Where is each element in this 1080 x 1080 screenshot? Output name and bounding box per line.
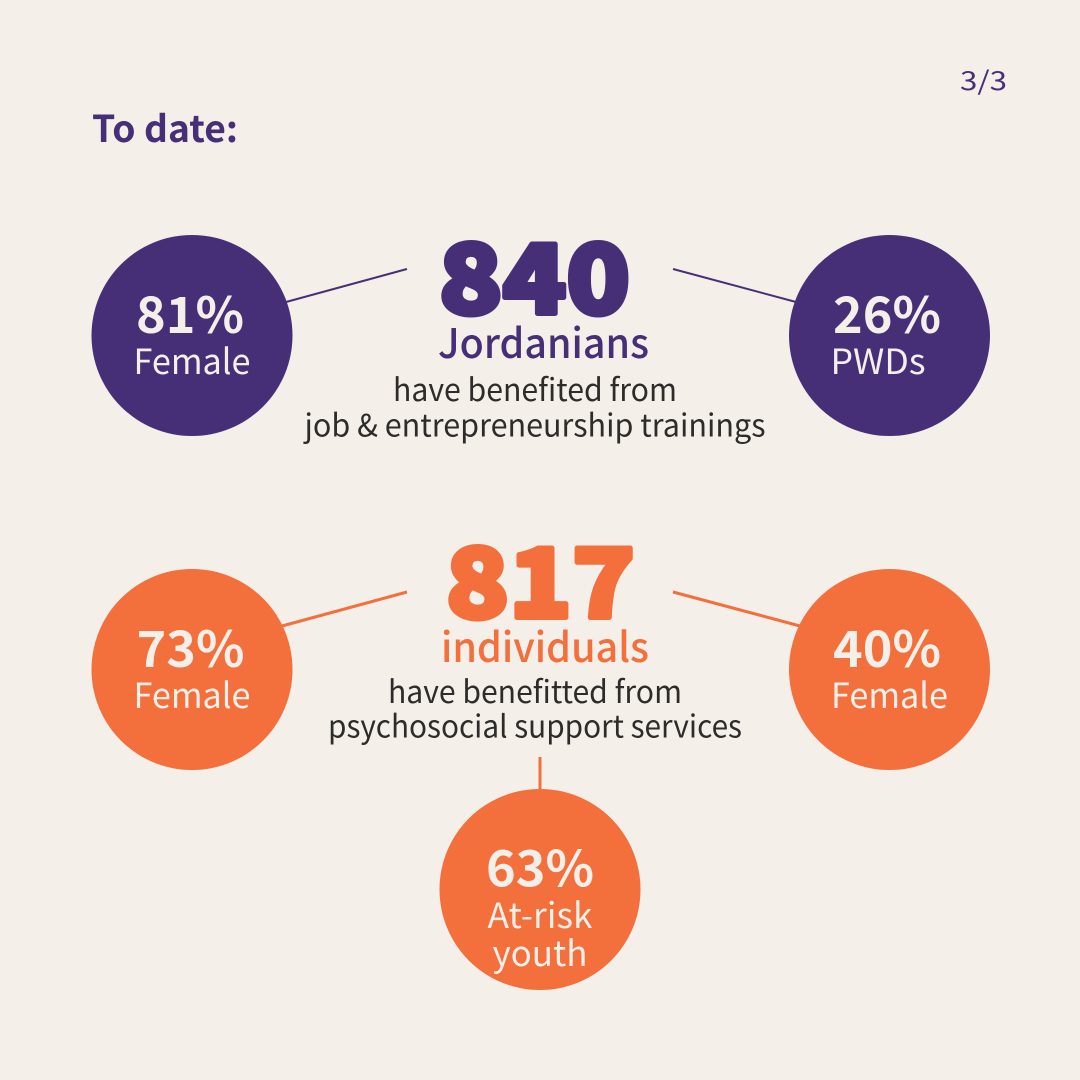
stat circle: 81% Female: 81% — [136, 276, 244, 348]
connector: left purple — [286, 269, 407, 302]
big number 840: 840 — [439, 202, 630, 342]
description: psychosocial — [328, 667, 742, 746]
connector: left orange — [282, 592, 407, 626]
label: individuals: individuals — [441, 614, 649, 674]
panel: job and entrepreneurship trainings — [92, 202, 990, 446]
description: trainings: have benefited from — [393, 365, 677, 410]
stat circle: 73% Female: 73% — [136, 610, 244, 682]
stat circle: 63% At-risk youth: youth — [492, 926, 588, 977]
stat circle: 63% At-risk youth — [440, 789, 640, 990]
stat circle: 63% At-risk youth: 63% — [486, 830, 594, 902]
stat circle: 26% PWDs: PWDs — [830, 334, 926, 385]
stat circle: 63% At-risk youth: At-risk — [488, 888, 592, 939]
title: To date: — [92, 99, 238, 153]
description: trainings: job & entrepreneurship trainings — [303, 400, 766, 446]
stat circle: 26% PWDs — [789, 235, 990, 436]
stat circle: 73% Female — [92, 569, 292, 770]
stat circle: 73% Female: Female — [134, 668, 250, 719]
big number 817: 817 — [446, 506, 635, 646]
stat circle: 81% Female — [92, 235, 292, 436]
label: Jordanians: Jordanians — [438, 310, 649, 370]
connector: right orange — [673, 592, 800, 626]
stat circle: 81% Female: Female — [134, 334, 250, 385]
connector: right purple — [673, 269, 796, 302]
stat circle: 26% PWDs: 26% — [833, 276, 941, 348]
stat circle: 40% Female: 40% — [833, 610, 941, 682]
description: trainings — [303, 365, 766, 446]
page number: 3/3 — [960, 61, 1007, 98]
stat circle: 40% Female: Female — [831, 668, 948, 719]
panel: psychosocial support services — [92, 506, 990, 990]
description: psychosocial: psychosocial support services — [328, 702, 742, 746]
stat circle: 40% Female — [789, 569, 990, 770]
description: psychosocial: have benefitted from — [388, 667, 682, 712]
connector: bottom orange — [538, 757, 542, 790]
